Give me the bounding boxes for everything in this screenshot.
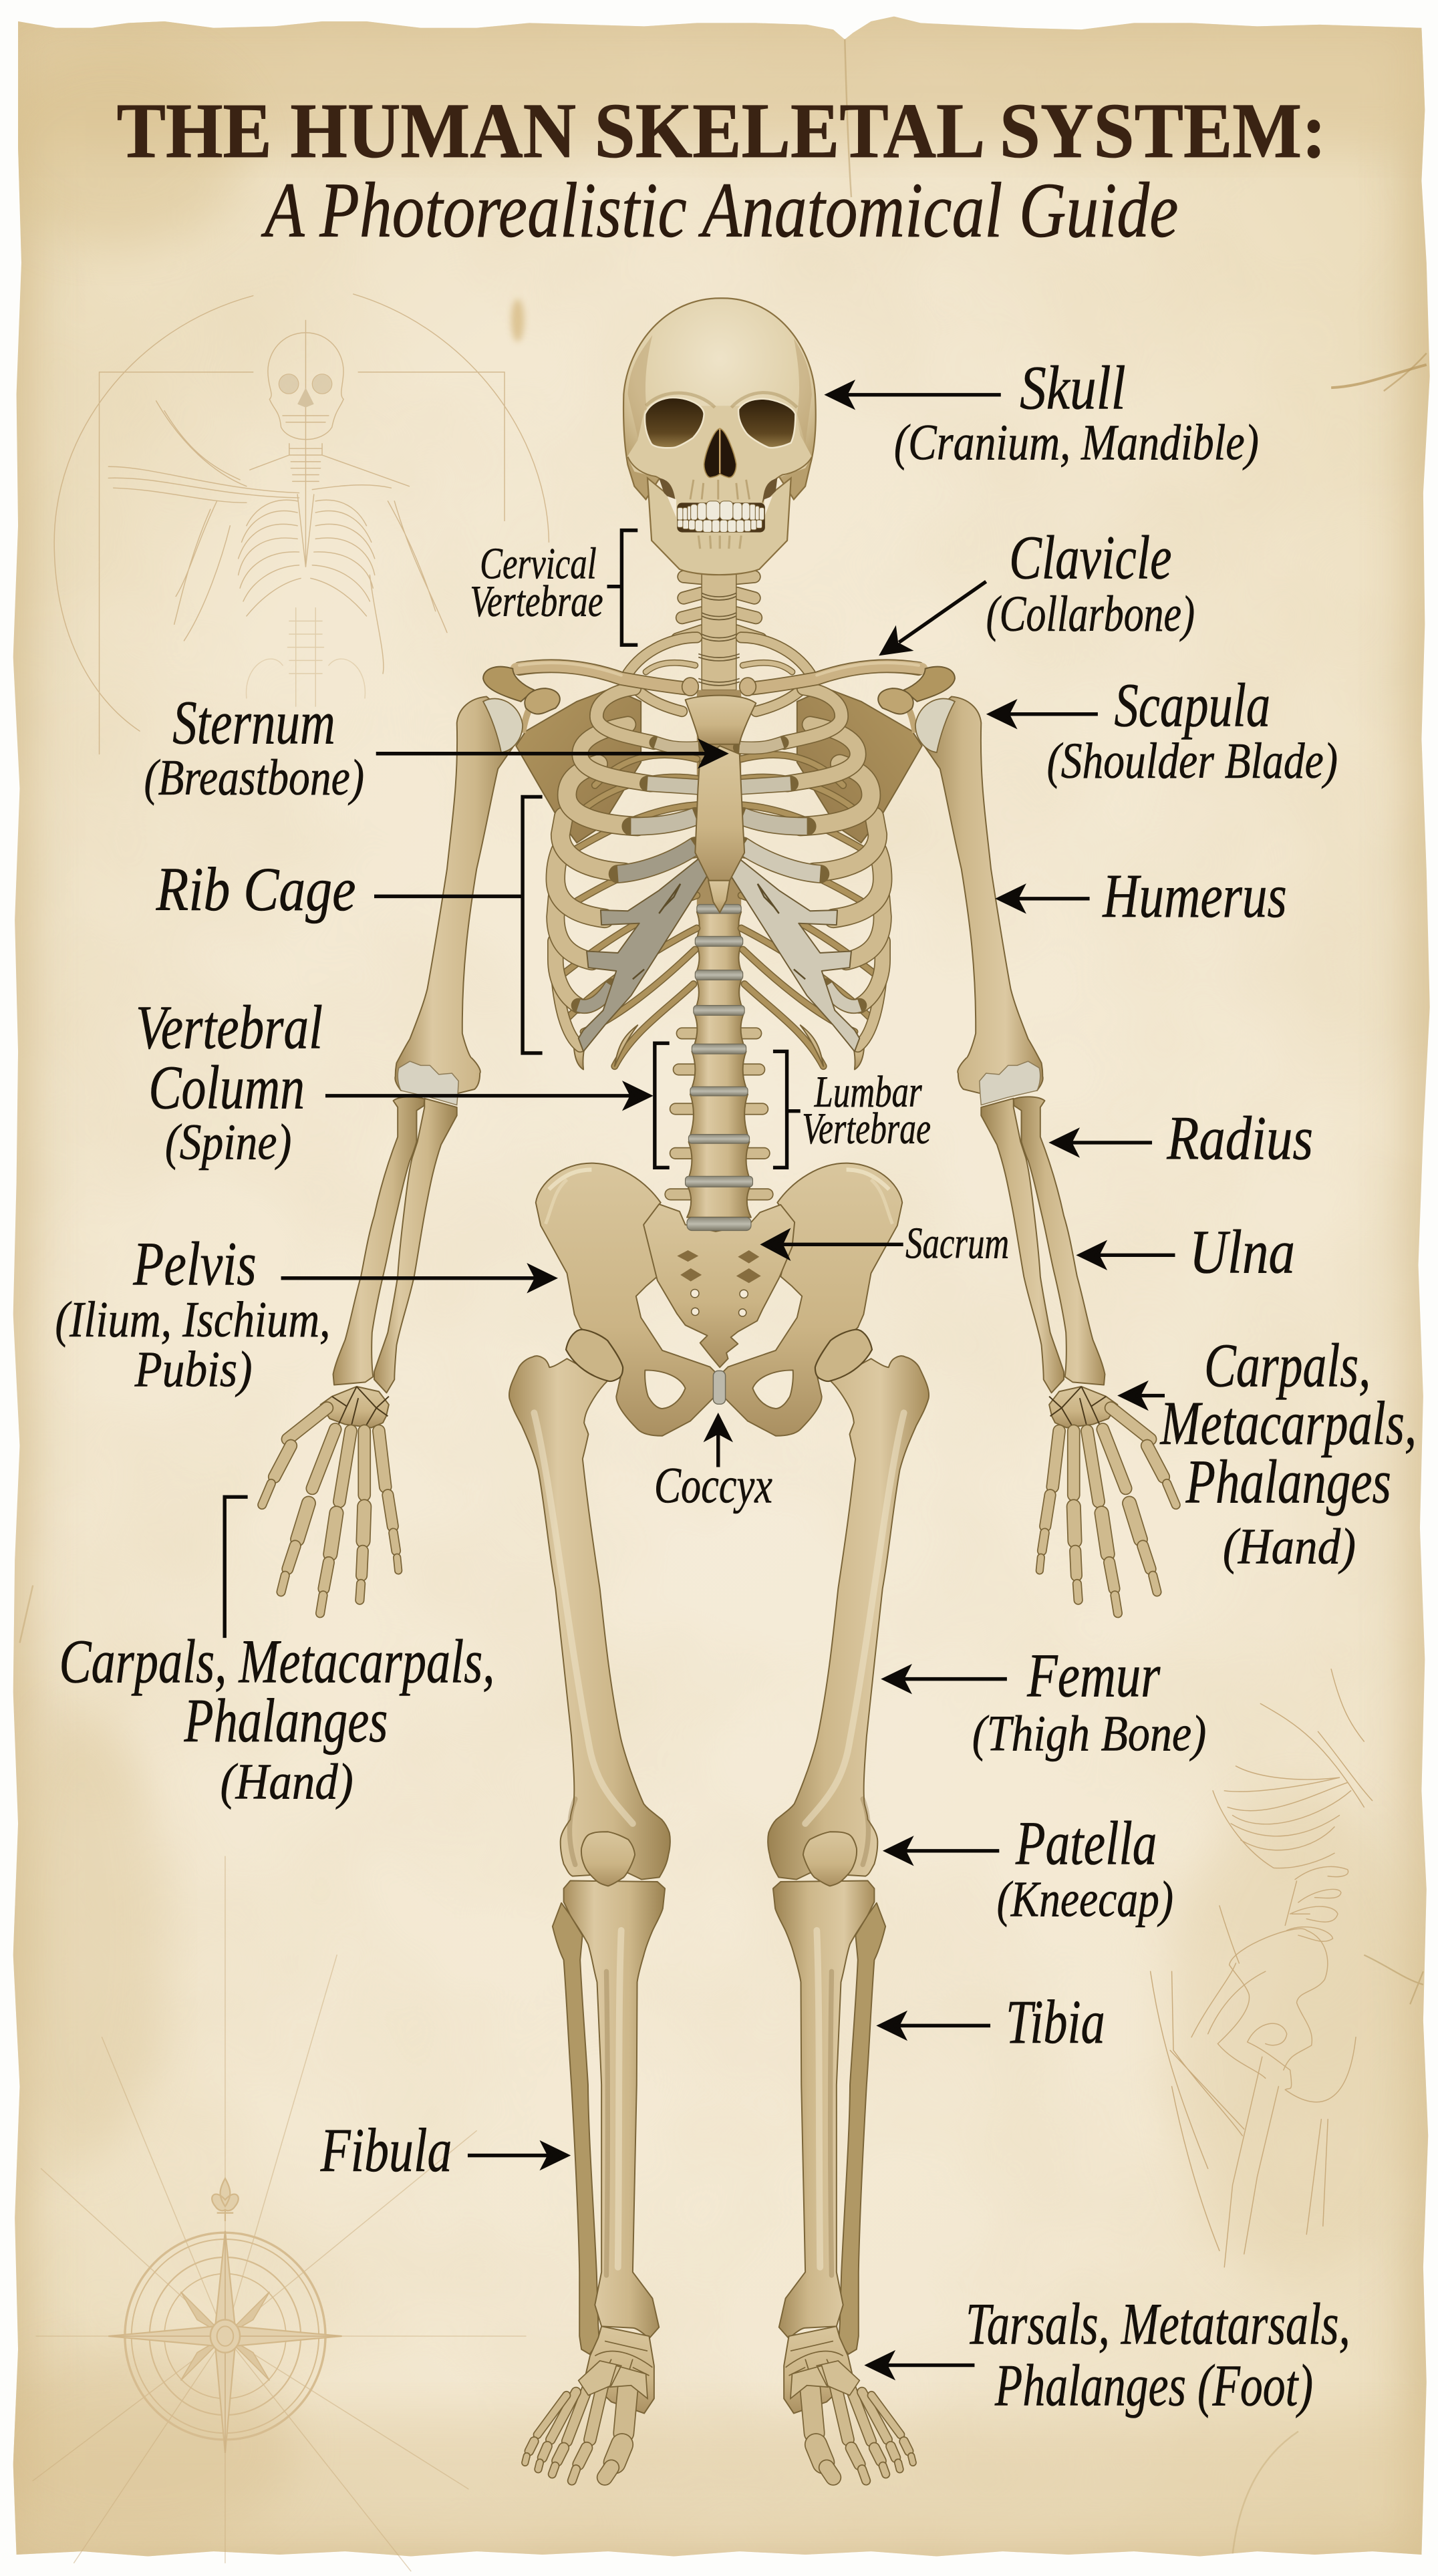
label: clavicle: Clavicle: [1009, 523, 1172, 592]
open foramina: [691, 1289, 748, 1316]
label: pelvis: Pubis): [134, 1342, 253, 1398]
acromion: [483, 667, 534, 702]
big toe: [623, 2389, 628, 2433]
intervertebral discs: [686, 904, 752, 1187]
mandible: [648, 478, 791, 575]
compass rose sketch: [33, 1856, 526, 2571]
label: rib cage: Rib Cage: [156, 855, 355, 924]
label: fibula: Fibula: [320, 2116, 452, 2185]
cervical vertebrae: [677, 572, 761, 690]
label: ulna: Ulna: [1189, 1218, 1295, 1287]
left orbit: [645, 398, 704, 448]
humeral head: [483, 698, 523, 752]
temple shading: [628, 335, 812, 444]
teeth: [677, 501, 765, 533]
label: hand, right side: [1121, 1332, 1417, 1575]
floating rib tail: [615, 1025, 637, 1066]
right hip bone: [723, 1163, 902, 1436]
label: fibula: [320, 2116, 567, 2185]
skeleton: [262, 298, 1176, 2480]
label: lumbar vertebrae: Lumbar: [814, 1068, 923, 1117]
label: cervical vertebrae: Cervical: [480, 539, 597, 588]
faint Vitruvian sketch: [54, 294, 549, 754]
label: pelvis: [55, 1230, 554, 1398]
toe 2: [590, 2376, 605, 2440]
toe 3: [567, 2382, 589, 2441]
label: vertebral column: (Spine): [165, 1115, 291, 1171]
label: hand, left side: Phalanges: [184, 1687, 388, 1755]
label: cervical vertebrae: [470, 531, 637, 645]
label: ulna: [1081, 1218, 1295, 1287]
label: scapula: Scapula: [1114, 672, 1270, 740]
right arm: [878, 667, 1176, 1613]
label: clavicle: (Collarbone): [986, 586, 1195, 642]
label: radius: [1053, 1105, 1313, 1173]
sternal body: [695, 746, 744, 881]
label: skull: [829, 353, 1259, 471]
cranium: [623, 298, 816, 499]
tarsals: [585, 2326, 654, 2414]
label: femur: (Thigh Bone): [972, 1705, 1206, 1761]
pubic symphysis: [713, 1371, 726, 1404]
thumb: [262, 1408, 327, 1505]
spine: [670, 572, 768, 1218]
annotations: [55, 353, 1417, 2418]
scapula left: [516, 688, 641, 843]
nasal aperture: [704, 428, 736, 478]
top lumbar vertebra and discs: [687, 1218, 751, 1230]
lumbar vertebrae: [687, 911, 751, 1218]
label: humerus: Humerus: [1102, 862, 1287, 931]
little finger: [379, 1431, 398, 1570]
label: lumbar vertebrae: Vertebrae: [802, 1105, 931, 1153]
label: cervical vertebrae: Vertebrae: [470, 577, 603, 626]
label: radius: Radius: [1166, 1105, 1313, 1173]
femoral head: [566, 1330, 623, 1381]
label: coccyx: Coccyx: [654, 1458, 772, 1514]
title: [117, 87, 1326, 254]
clavicle left: [516, 663, 698, 696]
label: hand, right side: Carpals,: [1204, 1332, 1371, 1401]
coracoid: [525, 688, 560, 714]
patella: [581, 1832, 635, 1886]
brow shade: [646, 393, 797, 408]
label: hand, left side: [59, 1497, 494, 1810]
chin roots: [698, 535, 741, 549]
first rib: [628, 637, 697, 712]
face: [627, 406, 812, 509]
right leg: [768, 1330, 929, 2480]
left hip bone: [536, 1163, 715, 1436]
skull: [623, 298, 816, 575]
carpals: [321, 1387, 389, 1427]
ring finger: [360, 1431, 364, 1600]
label: femur: [885, 1641, 1206, 1761]
tibia: [564, 1881, 665, 2338]
pelvis and thigh sketch: [1151, 1669, 1373, 2267]
rib cage left: [555, 637, 708, 1070]
label: rib cage: [156, 797, 543, 1053]
index finger: [281, 1429, 335, 1592]
label: tibia: Tibia: [1006, 1988, 1105, 2057]
toe 4: [551, 2392, 576, 2440]
label: sacrum: Sacrum: [905, 1219, 1009, 1268]
foot: [525, 2326, 654, 2480]
manubrium: [686, 696, 756, 744]
label: hand, left side: Carpals, Metacarpals,: [59, 1628, 494, 1697]
clavicle right: [740, 663, 922, 696]
femur shading: [534, 1413, 633, 1824]
mid-foot: [579, 2361, 648, 2398]
label: sacrum: [764, 1219, 1009, 1268]
label: scapula: (Shoulder Blade): [1047, 733, 1338, 789]
label: humerus: [999, 862, 1287, 931]
label: scapula: [990, 672, 1338, 789]
label: skull: Skull: [1020, 353, 1126, 422]
fibula: [553, 1903, 599, 2354]
elbow cartilage: [398, 1061, 458, 1105]
label: patella: [887, 1810, 1173, 1927]
label: patella: Patella: [1015, 1810, 1157, 1878]
label: femur: Femur: [1026, 1641, 1161, 1710]
title line 1: THE HUMAN SKELETAL SYSTEM:: [117, 87, 1326, 174]
middle finger: [320, 1431, 351, 1613]
forearm bone A: [333, 1097, 424, 1385]
label: sternum: Sternum: [172, 689, 335, 758]
label: clavicle: [882, 523, 1195, 654]
label: pelvis: Pelvis: [132, 1230, 257, 1299]
humerus: [395, 696, 519, 1093]
transverse processes: [670, 1033, 768, 1194]
ribs 9 to 2: [555, 688, 654, 1046]
label: lumbar vertebrae: [655, 1043, 931, 1167]
maxilla shading: [690, 480, 749, 499]
label: tibia: [881, 1988, 1105, 2057]
label: pelvis: (Ilium, Ischium,: [55, 1292, 330, 1348]
costal cartilage: [579, 742, 708, 1051]
tibia highlight: [618, 1930, 621, 2267]
thoracic column: [697, 690, 741, 911]
label: sternum: [144, 689, 725, 806]
label: vertebral column: [136, 994, 649, 1171]
back ribs: [559, 754, 697, 1070]
left arm: [262, 667, 560, 1613]
jaw gaps: [668, 496, 772, 517]
cheek hollows: [659, 478, 777, 501]
label: coccyx: [654, 1417, 772, 1514]
zygomatic edges: [628, 456, 812, 503]
label: patella: (Kneecap): [997, 1871, 1173, 1927]
right orbit: [738, 399, 795, 448]
label: sternum: (Breastbone): [144, 750, 364, 806]
scapula right: [797, 688, 922, 843]
label: foot: [869, 2291, 1350, 2418]
forearm bone B: [374, 1099, 457, 1393]
label: hand, right side: (Hand): [1223, 1519, 1356, 1575]
label: skull: (Cranium, Mandible): [894, 415, 1259, 471]
label: vertebral column: Column: [148, 1054, 305, 1123]
sternum: [686, 696, 756, 913]
left leg: [509, 1330, 670, 2480]
dark foramina: [677, 1250, 761, 1283]
toe 5: [537, 2396, 567, 2435]
femur: [509, 1356, 670, 1880]
label: vertebral column: Vertebral: [136, 994, 323, 1062]
label: foot: Phalanges (Foot): [994, 2353, 1313, 2418]
title line 2: A Photorealistic Anatomical Guide: [261, 166, 1178, 254]
xiphoid process: [708, 881, 730, 913]
sacrum: [643, 1204, 795, 1367]
label: hand, left side: (Hand): [221, 1753, 353, 1810]
rib cage right: [730, 637, 883, 1070]
